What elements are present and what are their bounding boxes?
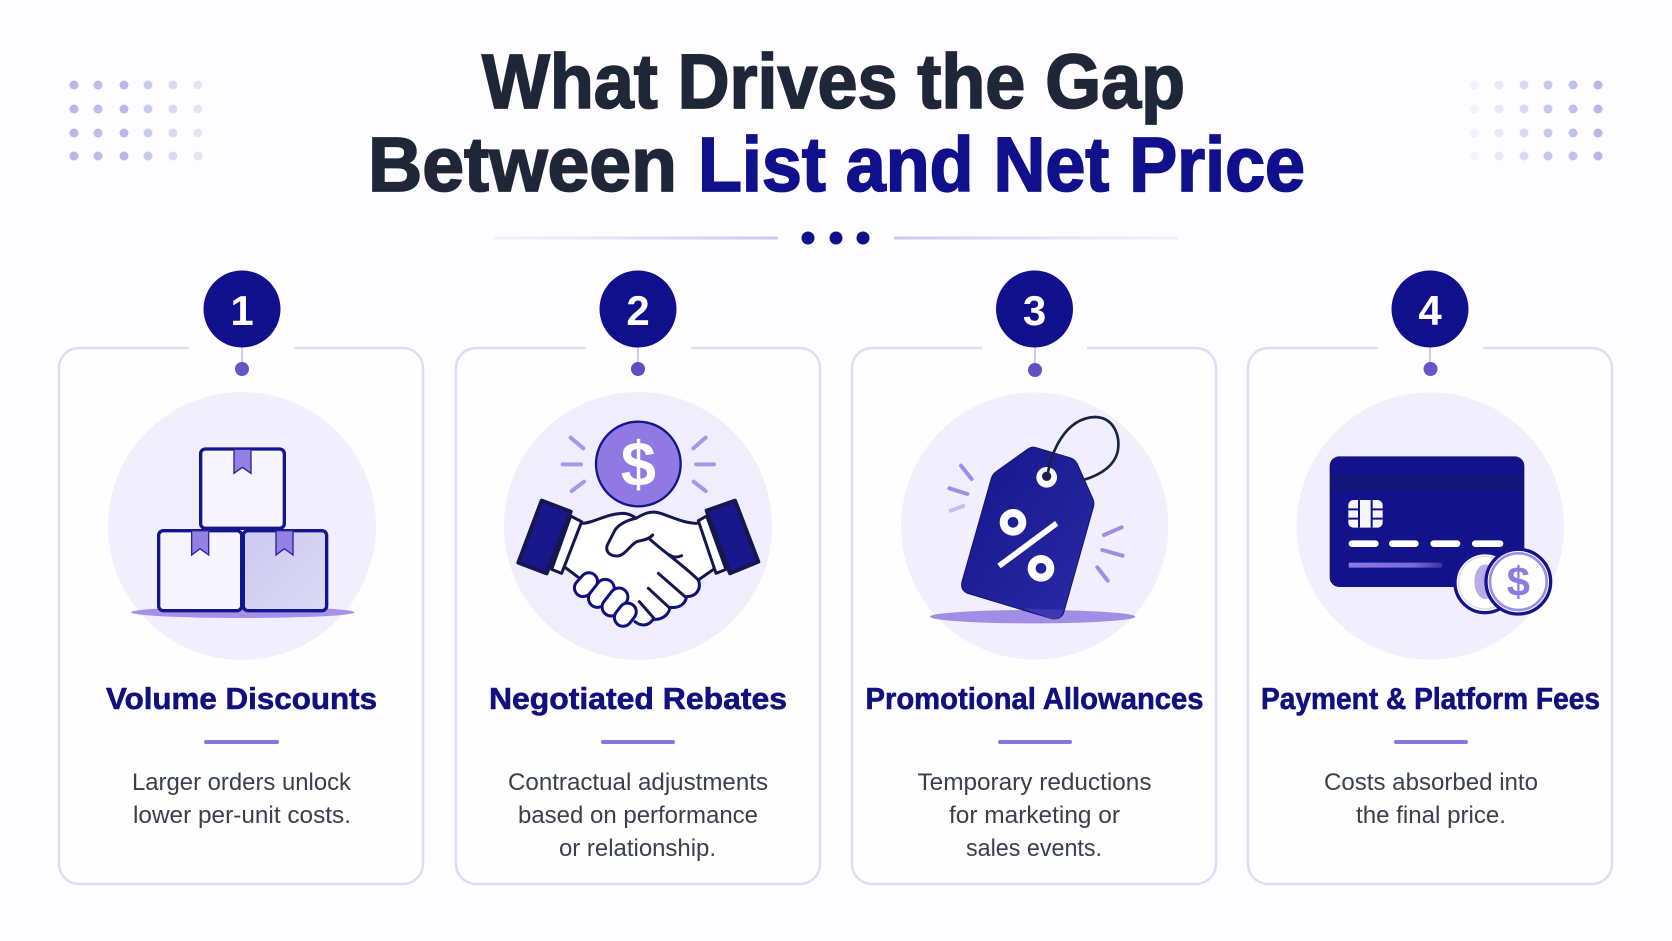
description <box>918 769 1152 862</box>
description: Costs absorbed into <box>1324 769 1538 796</box>
connector and dot <box>631 345 645 376</box>
title: List and Net Price <box>698 122 1305 208</box>
title: Between <box>368 122 677 208</box>
description: Contractual adjustments <box>508 769 768 796</box>
heading: Promotional Allowances <box>866 681 1204 716</box>
connector and dot <box>1028 345 1042 377</box>
description: for marketing or <box>949 802 1120 829</box>
number badge 1: 1 <box>230 287 254 334</box>
icon: credit card with coins: $ <box>1507 558 1530 605</box>
panel: payment and platform fees <box>1248 270 1612 884</box>
icon: handshake with coin <box>504 392 772 660</box>
description <box>132 769 352 829</box>
heading: Payment & Platform Fees <box>1261 681 1600 716</box>
heading: Volume Discounts <box>106 681 377 716</box>
title divider <box>493 232 1178 244</box>
description: Larger orders unlock <box>132 769 352 796</box>
panel: volume discounts <box>59 270 423 884</box>
accent bar <box>1394 740 1468 744</box>
description: lower per-unit costs. <box>133 802 351 829</box>
number badge 2: 2 <box>626 287 650 334</box>
description <box>508 769 768 862</box>
title: What Drives the Gap <box>482 39 1185 125</box>
panel: negotiated rebates <box>456 270 820 884</box>
description: sales events. <box>966 835 1102 862</box>
number badge 4 <box>1392 270 1468 348</box>
accent bar <box>998 740 1072 744</box>
decorative dot grid: top left <box>70 80 202 160</box>
panel: promotional allowances <box>852 270 1216 884</box>
decorative dot grid: top right <box>1470 80 1602 160</box>
description: or relationship. <box>559 835 716 862</box>
title <box>368 39 1305 208</box>
number badge 3: 3 <box>1023 287 1046 334</box>
heading: Negotiated Rebates <box>489 681 787 716</box>
accent bar <box>601 740 675 744</box>
icon: credit card with coins <box>1297 392 1564 660</box>
number badge 2 <box>600 270 676 348</box>
number badge 3 <box>996 270 1073 348</box>
number badge 1 <box>204 270 280 348</box>
description: Temporary reductions <box>918 769 1152 796</box>
number badge 4: 4 <box>1418 287 1442 334</box>
description <box>1324 769 1538 829</box>
description: based on performance <box>518 802 758 829</box>
icon: stacked boxes <box>108 392 376 660</box>
icon: percent price tag <box>901 392 1168 660</box>
connector and dot <box>1424 345 1438 376</box>
connector and dot <box>235 345 249 376</box>
description: the final price. <box>1356 802 1506 829</box>
accent bar <box>204 740 279 744</box>
icon: handshake with coin: $ <box>621 430 656 500</box>
